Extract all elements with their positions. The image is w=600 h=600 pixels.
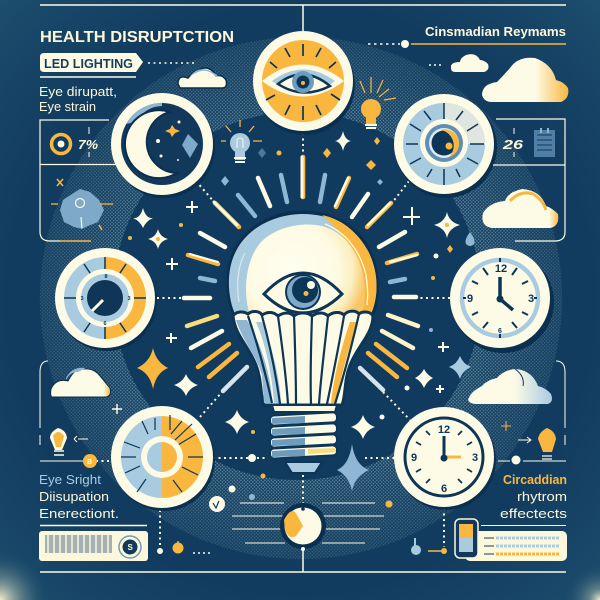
icon: small bulb top left (221, 120, 262, 163)
left text block (39, 84, 117, 114)
right upper box: 26 (502, 137, 524, 152)
clouds (51, 54, 568, 404)
cloud: right lower (468, 369, 552, 404)
circle: moon (111, 93, 215, 198)
barcode label (39, 526, 148, 561)
circle: bottom right clock (394, 407, 496, 510)
right lower text (500, 472, 568, 521)
right upper box (493, 119, 565, 241)
cloud: right big (482, 58, 568, 102)
left text block: Eye dirupatt, (39, 84, 117, 99)
right lower text: Circaddian (503, 472, 567, 487)
barcode label: S (128, 543, 134, 552)
icon: small bulb top right (360, 77, 396, 129)
left lower text: Eye Sright (39, 472, 101, 487)
right lower icon (498, 361, 566, 464)
led lighting label (40, 53, 196, 77)
light bulb (228, 212, 378, 473)
circle: right clock: 3 (528, 293, 534, 305)
circle: bottom right clock: 6 (441, 483, 447, 495)
bulb skirt (233, 311, 373, 405)
icon: gear with percent (52, 127, 98, 157)
rays around the bulb (184, 157, 418, 391)
right lower text: rhytrom (517, 489, 567, 504)
circle: top eye (253, 31, 355, 135)
halftone ring behind the circles (39, 36, 563, 560)
icon: calendar (534, 128, 555, 157)
icon: broken blue dial (51, 179, 113, 230)
circle: left dial (55, 248, 157, 351)
left lower frame and icon (40, 361, 97, 468)
dot on left spoke (248, 454, 256, 462)
circle: left dial: 8 (104, 274, 108, 280)
right lower text: effectects (500, 506, 568, 521)
circle: left dial: 6 (103, 321, 107, 327)
left lower frame and icon: B (87, 459, 92, 466)
left lower text: Diisupation (39, 489, 109, 504)
coloured stars (128, 137, 453, 508)
circle: bottom right clock: 3 (472, 452, 478, 464)
right heading (368, 24, 566, 65)
blue stars and drop (221, 148, 474, 500)
cloud: left lower (51, 368, 110, 397)
bottom small icons (157, 486, 447, 555)
cloud: right mid (482, 189, 558, 228)
icon: gear with percent: 7% (78, 137, 98, 152)
title: HEALTH DISRUPTCTION (40, 29, 234, 46)
circle: left dial: 3 (127, 296, 131, 302)
right heading: Cinsmadian Reymams (425, 24, 566, 39)
circle: right clock: 12 (495, 263, 507, 275)
bottom knob (232, 503, 384, 551)
circle: right clock (450, 248, 554, 353)
circle: right clock: 6 (498, 328, 502, 335)
dotted connectors (96, 133, 452, 548)
circle: right clock: 9 (467, 293, 473, 305)
bar panel (455, 519, 567, 561)
left text block: Eye strain (39, 99, 96, 114)
left lower text (39, 472, 119, 521)
circle: half sun (111, 406, 215, 511)
bulb eye (264, 273, 342, 313)
led lighting label: LED LIGHTING (44, 56, 133, 71)
circle: left dial: 3 (80, 296, 84, 302)
left lower text: Enerectiont. (39, 506, 119, 521)
cloud: left top (178, 68, 226, 88)
circle: bottom right clock: 12 (438, 424, 450, 436)
sparkles (112, 131, 460, 439)
circle: bottom right clock: 9 (411, 452, 417, 464)
bulb glass (228, 212, 378, 318)
circle: right eye (394, 94, 497, 198)
bulb screw base (270, 405, 337, 473)
left upper box (40, 120, 118, 241)
cloud: right small (451, 54, 488, 72)
